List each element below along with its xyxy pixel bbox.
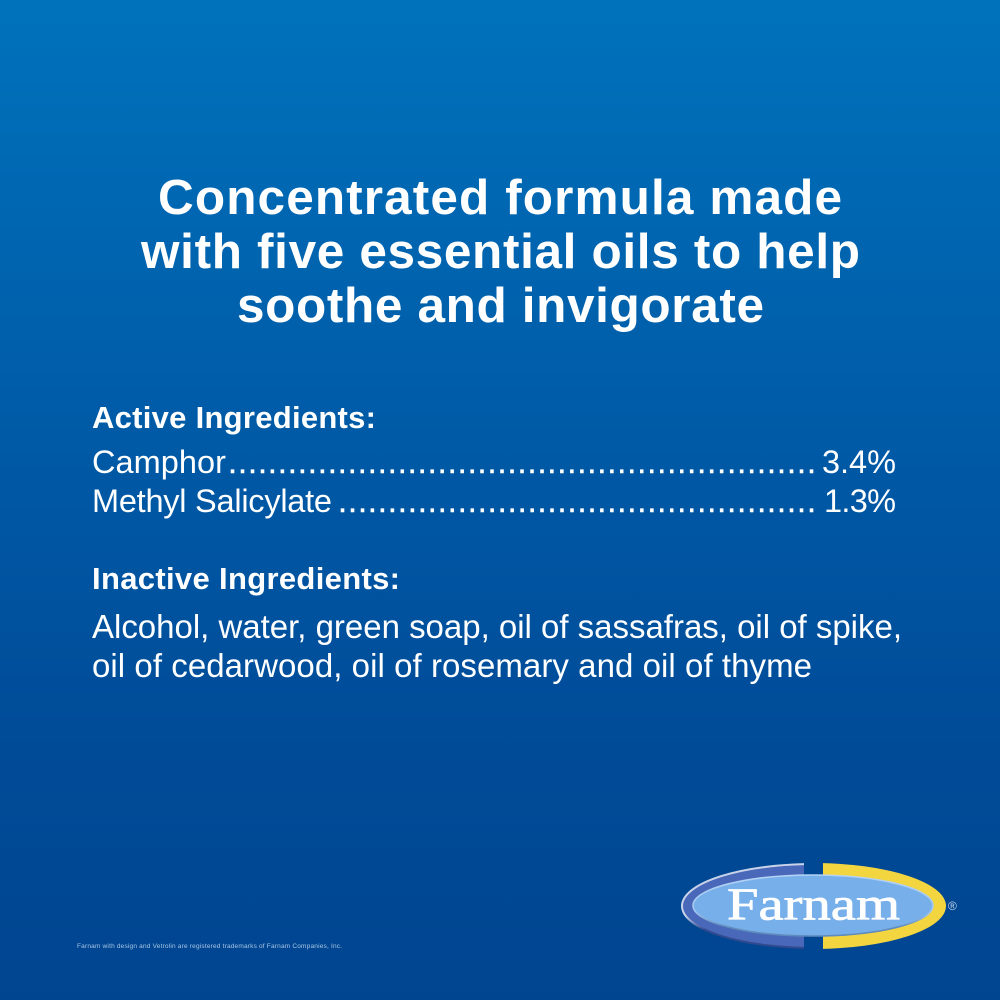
logo left blue arc (681, 863, 804, 949)
logo: Farnam (681, 863, 957, 949)
title (140, 170, 860, 333)
row: methyl salicylate: ................................................ (338, 483, 816, 519)
inactive ingredients list (92, 608, 902, 684)
row: methyl salicylate: Methyl Salicylate (92, 483, 332, 519)
logo wordmark: Farnam (727, 880, 900, 930)
title: with five essential oils to help (140, 224, 860, 279)
row: camphor: Camphor (92, 444, 226, 480)
trademark footnote: Farnam with design and Vetrolin are registered trademarks of Farnam Companies, Inc. (77, 943, 342, 950)
inactive ingredients list: oil of cedarwood, oil of rosemary and oil of thyme (92, 647, 812, 684)
logo inner oval (693, 875, 933, 936)
registered mark: ® (948, 899, 957, 913)
active ingredients block (92, 400, 896, 519)
logo right yellow arc (823, 863, 946, 949)
inactive ingredients block (92, 561, 902, 684)
heading: active ingredients: Active Ingredients: (92, 400, 376, 435)
heading: inactive ingredients: Inactive Ingredients: (92, 561, 400, 596)
row: methyl salicylate: 1.3% (824, 483, 896, 519)
title: soothe and invigorate (237, 278, 764, 333)
row: camphor: 3.4% (822, 444, 896, 480)
row: camphor: ........................................................... (228, 444, 816, 480)
inactive ingredients list: Alcohol, water, green soap, oil of sassafras, oil of spike, (92, 608, 902, 645)
title: Concentrated formula made (158, 170, 842, 225)
row: methyl salicylate (92, 483, 896, 519)
